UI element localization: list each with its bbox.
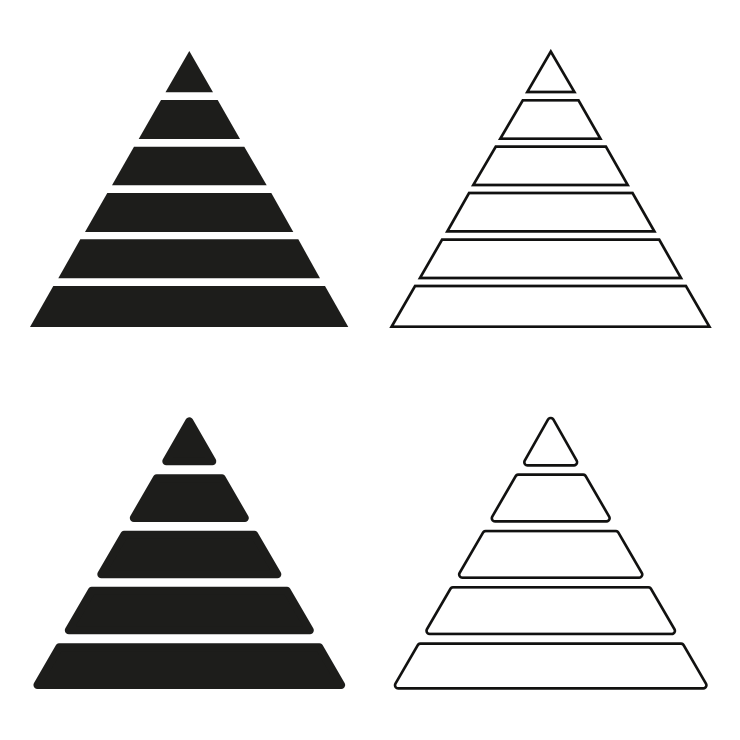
panel: outlined rounded five-tier pyramid — [398, 421, 703, 685]
tier 3 — [473, 147, 628, 185]
tier 2 — [139, 100, 240, 139]
tier 4 — [430, 590, 672, 631]
tier 2 — [495, 478, 606, 518]
tier 1 — [166, 421, 212, 461]
tier 6 — [30, 286, 348, 327]
tier 3 — [101, 535, 277, 574]
tier 2 — [134, 478, 245, 518]
tier 5 — [37, 647, 341, 685]
tier 6 — [392, 286, 709, 327]
tier 1 — [528, 421, 574, 462]
tier 4 — [85, 193, 293, 232]
tier 4 — [69, 591, 310, 630]
tier 3 — [462, 534, 639, 574]
panel: solid sharp six-tier pyramid — [30, 51, 348, 327]
tier 5 — [58, 239, 320, 278]
tier 2 — [500, 100, 600, 139]
tier 5 — [398, 647, 703, 685]
tier 3 — [112, 147, 267, 185]
panel: solid rounded five-tier pyramid — [37, 421, 341, 685]
tier 5 — [420, 240, 681, 278]
tier 1 — [527, 52, 574, 92]
tier 1 — [166, 51, 213, 92]
tier 4 — [447, 193, 654, 231]
panel: outlined sharp six-tier pyramid — [392, 52, 709, 327]
